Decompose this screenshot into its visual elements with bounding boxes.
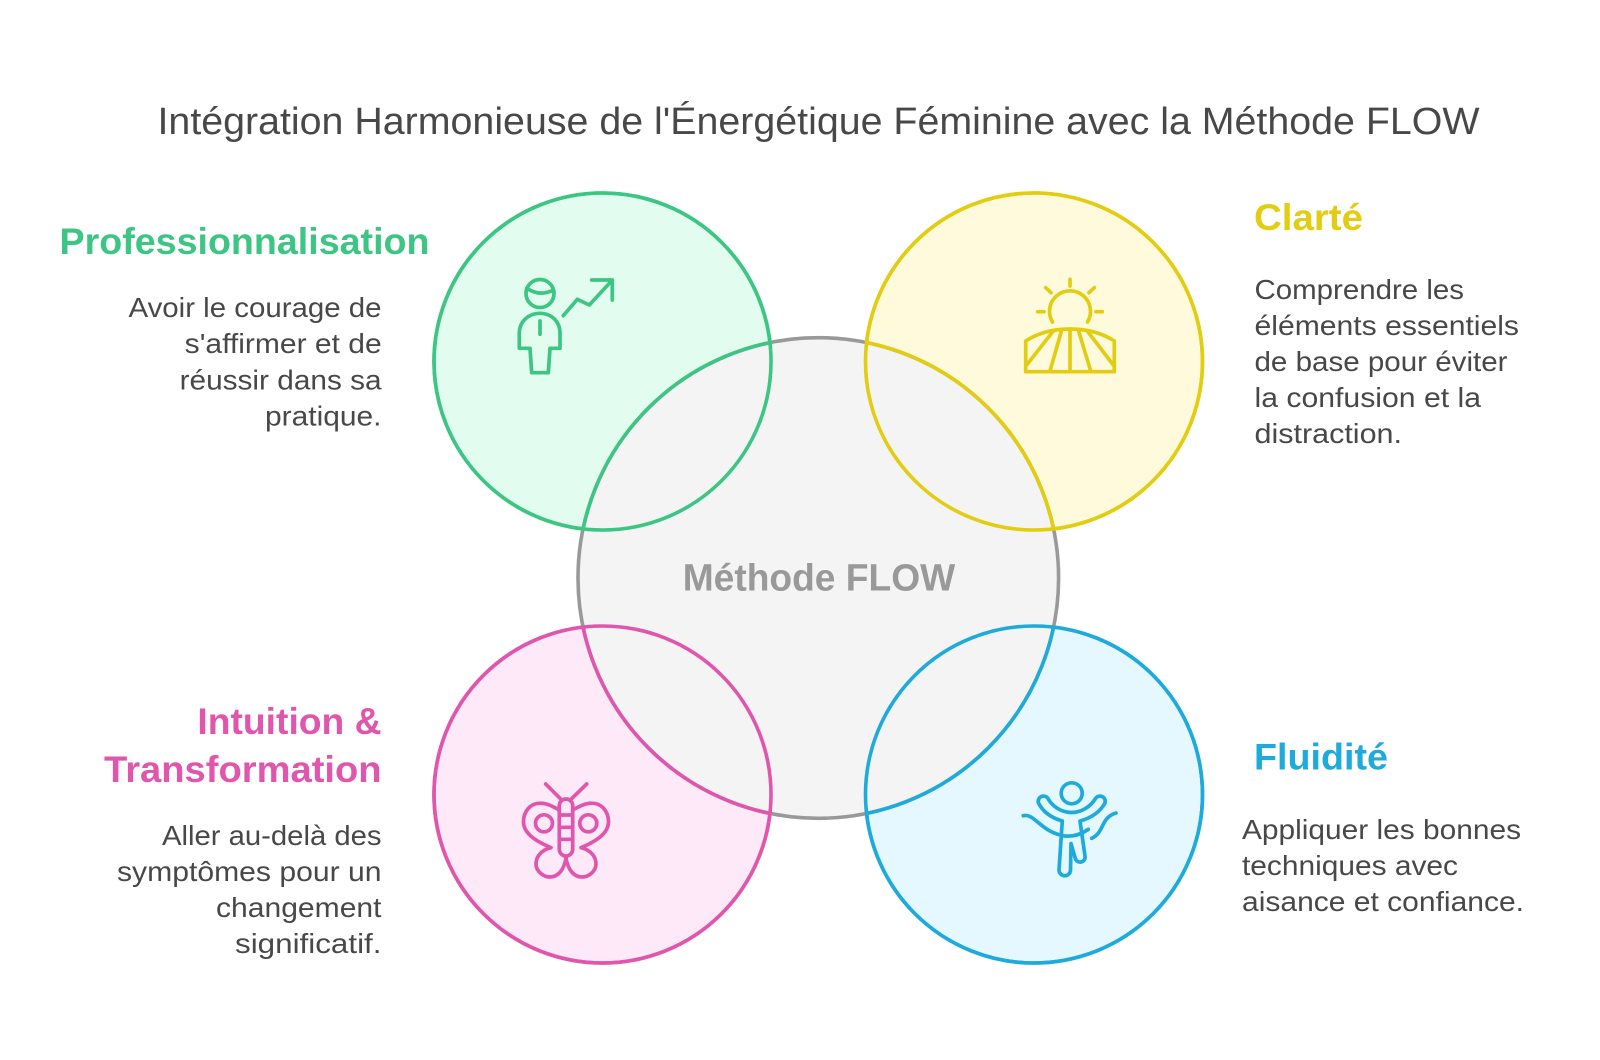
text: Intuition & Transformation description: changement (216, 892, 382, 923)
icon: sun over field (1026, 279, 1114, 372)
text: Clarté description: distraction. (1254, 418, 1402, 449)
central circle: Méthode FLOW (578, 338, 1059, 818)
text: Professionnalisation description: Avoir le courage de (128, 292, 382, 323)
text: Fluidité description: aisance et confiance. (1242, 886, 1524, 917)
text: Professionnalisation description: réussir dans sa (180, 364, 382, 396)
text: Clarté description: la confusion et la (1254, 382, 1481, 413)
circle fill: Fluidité (866, 626, 1202, 963)
text: Professionnalisation description: s'affirmer et de (185, 328, 382, 359)
heading: Clarté: Clarté (1254, 196, 1363, 238)
heading: Intuition & Transformation: Intuition & (197, 700, 382, 742)
center label: Méthode FLOW (683, 558, 955, 600)
text: Intuition & Transformation description: significatif. (235, 928, 382, 959)
text: Fluidité description: techniques avec (1242, 850, 1458, 881)
text: Intuition & Transformation description: symptômes pour un (117, 856, 382, 887)
heading: Intuition & Transformation (104, 700, 382, 790)
text: Fluidité description (1242, 814, 1524, 917)
icon: butterfly (524, 784, 608, 877)
heading: Professionnalisation: Professionnalisation (60, 220, 430, 262)
overlap outline: blue (864, 624, 1204, 965)
circle fill: Intuition & Transformation (434, 626, 771, 963)
text: Professionnalisation description (128, 292, 382, 432)
title: Intégration Harmonieuse de l'Énergétique Féminine avec la Méthode FLOW (158, 100, 1480, 143)
text: Clarté description: de base pour éviter (1254, 346, 1508, 377)
text: Intuition & Transformation description: Aller au-delà des (162, 820, 382, 851)
text: Fluidité description: Appliquer les bonnes (1242, 814, 1521, 845)
heading: Fluidité: Fluidité (1254, 736, 1388, 778)
text: Professionnalisation description: pratique. (265, 400, 382, 432)
text: Intuition & Transformation description (117, 820, 382, 959)
text: Clarté description (1254, 274, 1519, 449)
circle fill: Professionnalisation (434, 193, 771, 530)
overlap outline: green (432, 191, 773, 532)
text: Clarté description: Comprendre les (1254, 274, 1464, 305)
overlap outline: yellow (864, 191, 1204, 532)
icon: runner crossing ribbon (1023, 783, 1116, 876)
text: Clarté description: éléments essentiels (1254, 310, 1519, 341)
circle fill: Clarté (866, 193, 1202, 530)
icon: person with rising arrow (519, 280, 612, 373)
heading: Intuition & Transformation: Transformation (104, 748, 382, 790)
overlap outline: pink (432, 624, 773, 965)
